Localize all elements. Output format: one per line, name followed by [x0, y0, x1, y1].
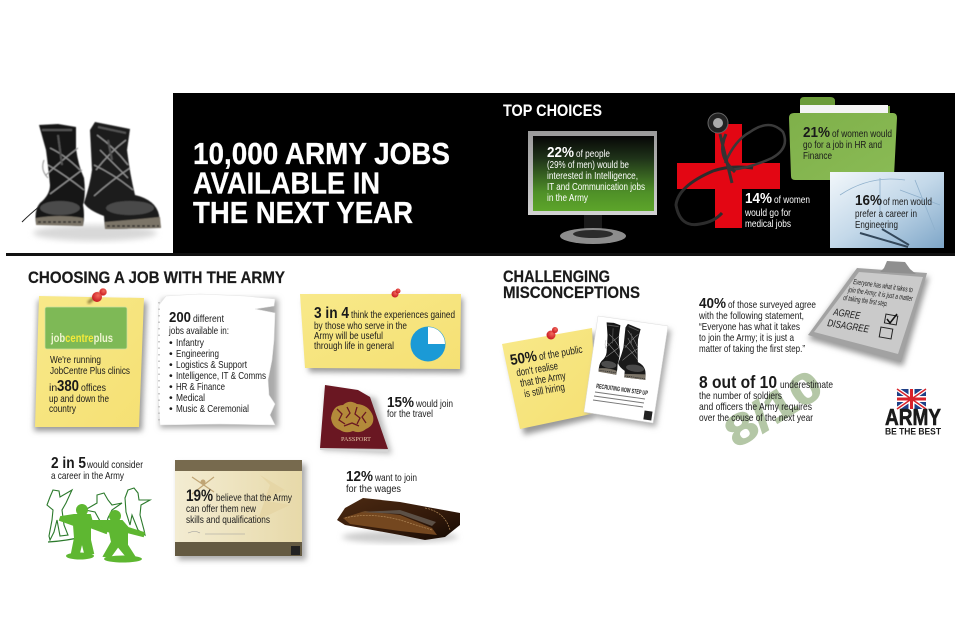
- panel: torn paper job list: Music & Ceremonial: [176, 403, 249, 415]
- panel: 3 in 4 note: through life in general: [314, 340, 394, 352]
- heading: challenging misconceptions: MISCONCEPTIONS: [503, 283, 640, 302]
- panel: certificate stat: [175, 460, 306, 560]
- panel: 50% note: of the public: [538, 344, 583, 363]
- title: [193, 136, 450, 230]
- icon: passport: [320, 385, 392, 454]
- stat: 12% wages: for the wages: [346, 483, 401, 495]
- panel: 50% note: [502, 327, 596, 435]
- black header band: [173, 93, 955, 255]
- stat: 12% wages: 12%: [346, 468, 373, 485]
- stat: 40% surveyed: “Everyone has what it takes: [699, 321, 800, 333]
- panel: green folder stat: go for a job in HR and: [803, 139, 882, 151]
- panel: monitor stat: 22%: [547, 144, 574, 161]
- panel: 3 in 4 note: think the experiences gained: [351, 309, 455, 321]
- panel: jobcentre note: in: [49, 382, 57, 394]
- heading: challenging misconceptions: CHALLENGING: [503, 267, 610, 286]
- panel: medical cross and stethoscope stat: medical jobs: [745, 218, 791, 230]
- panel: 50% note: that the Army: [519, 370, 567, 390]
- panel: torn paper job list: jobs available in:: [168, 325, 229, 337]
- panel: torn paper job list: different: [193, 313, 224, 325]
- panel: monitor stat: IT and Communication jobs: [547, 181, 645, 193]
- panel: certificate stat: can offer them new: [186, 503, 256, 515]
- panel: green folder stat: 21%: [803, 124, 830, 141]
- stat: 8 out of 10: over the couse of the next year: [699, 412, 813, 424]
- stat: 8 out of 10: underestimate: [780, 379, 833, 391]
- icon: clipboard checklist: Everyone has what it takes to: [853, 277, 913, 294]
- icon: toy soldiers: [47, 488, 150, 562]
- stat: 8 out of 10: and officers the Army requires: [699, 401, 812, 413]
- logo: army be the best: BE THE BEST: [885, 426, 941, 438]
- logo: army be the best: ARMY: [885, 404, 941, 430]
- icon: passport: PASSPORT: [341, 437, 371, 443]
- panel: recruiting poster: RECRUITING NOW STEP UP: [596, 383, 649, 397]
- panel: certificate stat: skills and qualifications: [186, 514, 270, 526]
- panel: green folder stat: [789, 97, 897, 180]
- panel: 50% note: 50%: [509, 348, 538, 369]
- panel: 50% note: is still hiring: [523, 381, 566, 400]
- panel: torn paper job list: Medical: [176, 392, 205, 404]
- logo: army be the best: [885, 389, 941, 438]
- panel: monitor stat: of people: [576, 148, 610, 160]
- panel: 50% note: don't realise: [515, 360, 559, 379]
- panel: 3 in 4 note: [300, 288, 463, 373]
- stat: 8 out of 10: 8 out of 10: [699, 372, 777, 392]
- panel: green folder stat: of women would: [832, 128, 892, 140]
- panel: blueprint engineering stat: [830, 172, 944, 248]
- panel: medical cross and stethoscope stat: of women: [774, 194, 810, 206]
- panel: 3 in 4 note: 3 in 4: [314, 305, 349, 322]
- stat: 40% surveyed: [698, 295, 816, 355]
- panel: medical cross and stethoscope stat: [676, 113, 810, 230]
- stat: 40% surveyed: 40%: [699, 295, 726, 312]
- panel: torn paper job list: •: [169, 359, 173, 371]
- stat: 2 in 5: would consider: [86, 459, 143, 471]
- panel: green folder stat: Finance: [803, 150, 832, 162]
- panel: blueprint engineering stat: Engineering: [855, 219, 898, 231]
- icon: clipboard checklist: AGREE: [832, 307, 861, 322]
- panel: monitor stat: interested in Intelligence,: [547, 170, 638, 182]
- icon: pin on note: [546, 327, 558, 340]
- panel: torn paper job list: •: [169, 370, 173, 382]
- panel: jobcentre note: country: [49, 403, 77, 415]
- panel: jobcentre note: jobcentreplus: [50, 331, 113, 345]
- title: THE NEXT YEAR: [193, 195, 413, 230]
- heading: choosing a job: CHOOSING A JOB WITH THE ARMY: [28, 268, 286, 287]
- panel: 3 in 4 note: by those who serve in the: [314, 320, 407, 332]
- stat: 40% surveyed: to join the Army; it is just a: [699, 332, 794, 344]
- panel: torn paper job list: 200: [169, 309, 191, 326]
- title: AVAILABLE IN: [193, 166, 380, 200]
- stat: 15% travel: for the travel: [387, 408, 433, 420]
- stat: 40% surveyed: matter of taking the first step.”: [699, 343, 805, 355]
- stat: 15% travel: [387, 394, 453, 420]
- icon: clipboard checklist: of taking the first step.: [843, 293, 889, 308]
- panel: certificate stat: believe that the Army: [216, 492, 293, 504]
- icon: clipboard checklist: join the Army; it is just a matter: [847, 285, 914, 303]
- icon: small red pin: [392, 288, 400, 298]
- icon: union flag: [897, 389, 926, 409]
- panel: certificate stat: 19%: [186, 486, 213, 505]
- stat: 40% surveyed: of those surveyed agree: [728, 299, 816, 311]
- panel: torn paper job list: Engineering: [176, 348, 219, 360]
- panel: medical cross and stethoscope stat: 14%: [745, 190, 772, 207]
- panel: torn paper job list: •: [169, 403, 173, 415]
- panel: blueprint engineering stat: prefer a career in: [855, 208, 917, 220]
- panel: torn paper job list: [157, 294, 278, 428]
- panel: torn paper job list: Logistics & Support: [176, 359, 247, 371]
- header baseline rule: [6, 253, 955, 256]
- panel: torn paper job list: •: [169, 348, 173, 360]
- stat: 12% wages: [346, 468, 417, 495]
- panel: recruiting poster: [584, 316, 671, 427]
- stat: 12% wages: want to join: [374, 472, 417, 484]
- panel: jobcentre note: JobCentre Plus clinics: [50, 365, 130, 377]
- panel: jobcentre note: 380: [57, 378, 79, 395]
- panel: torn paper job list: •: [169, 381, 173, 393]
- panel: jobcentre note: offices: [81, 382, 106, 394]
- panel: monitor stat: (29% of men) would be: [547, 159, 629, 171]
- stat: 8 out of 10: [699, 372, 833, 424]
- icon: clipboard checklist: DISAGREE: [827, 318, 870, 336]
- panel: jobcentre note: [34, 288, 147, 431]
- icon: red pin: [88, 288, 106, 303]
- graphic: 8/10 stencil: 8/10: [716, 361, 830, 457]
- panel: jobcentre note: up and down the: [49, 393, 109, 405]
- stat: 2 in 5: a career in the Army: [51, 470, 125, 482]
- panel: monitor stat: [528, 131, 657, 244]
- panel: medical cross and stethoscope stat: would go for: [744, 207, 791, 219]
- stat: 15% travel: would join: [415, 398, 453, 410]
- title: 10,000 ARMY JOBS: [193, 136, 450, 171]
- stat: 2 in 5: 2 in 5: [51, 455, 86, 472]
- stat: 40% surveyed: with the following statement,: [698, 310, 804, 322]
- stat: 8 out of 10: the number of soldiers: [699, 390, 782, 402]
- stat: 2 in 5: [51, 455, 143, 482]
- panel: monitor stat: in the Army: [547, 192, 589, 204]
- icon: leather wallet: [337, 498, 460, 543]
- heading: top choices: TOP CHOICES: [503, 101, 602, 120]
- icon: pair of worn boots: [22, 122, 161, 241]
- panel: torn paper job list: •: [169, 392, 173, 404]
- panel: torn paper job list: Intelligence, IT & Comms: [176, 370, 266, 382]
- panel: torn paper job list: •: [169, 337, 173, 349]
- panel: blueprint engineering stat: 16%: [855, 192, 882, 209]
- panel: torn paper job list: HR & Finance: [176, 381, 225, 393]
- panel: blueprint engineering stat: of men would: [883, 196, 932, 208]
- panel: jobcentre note: We're running: [50, 354, 101, 366]
- stat: 15% travel: 15%: [387, 394, 414, 411]
- icon: clipboard checklist: [808, 261, 929, 366]
- heading: challenging misconceptions: [503, 267, 640, 302]
- panel: torn paper job list: Infantry: [176, 337, 205, 349]
- panel: 3 in 4 note: Army will be useful: [314, 330, 383, 342]
- pie chart: three quarters: [410, 326, 446, 362]
